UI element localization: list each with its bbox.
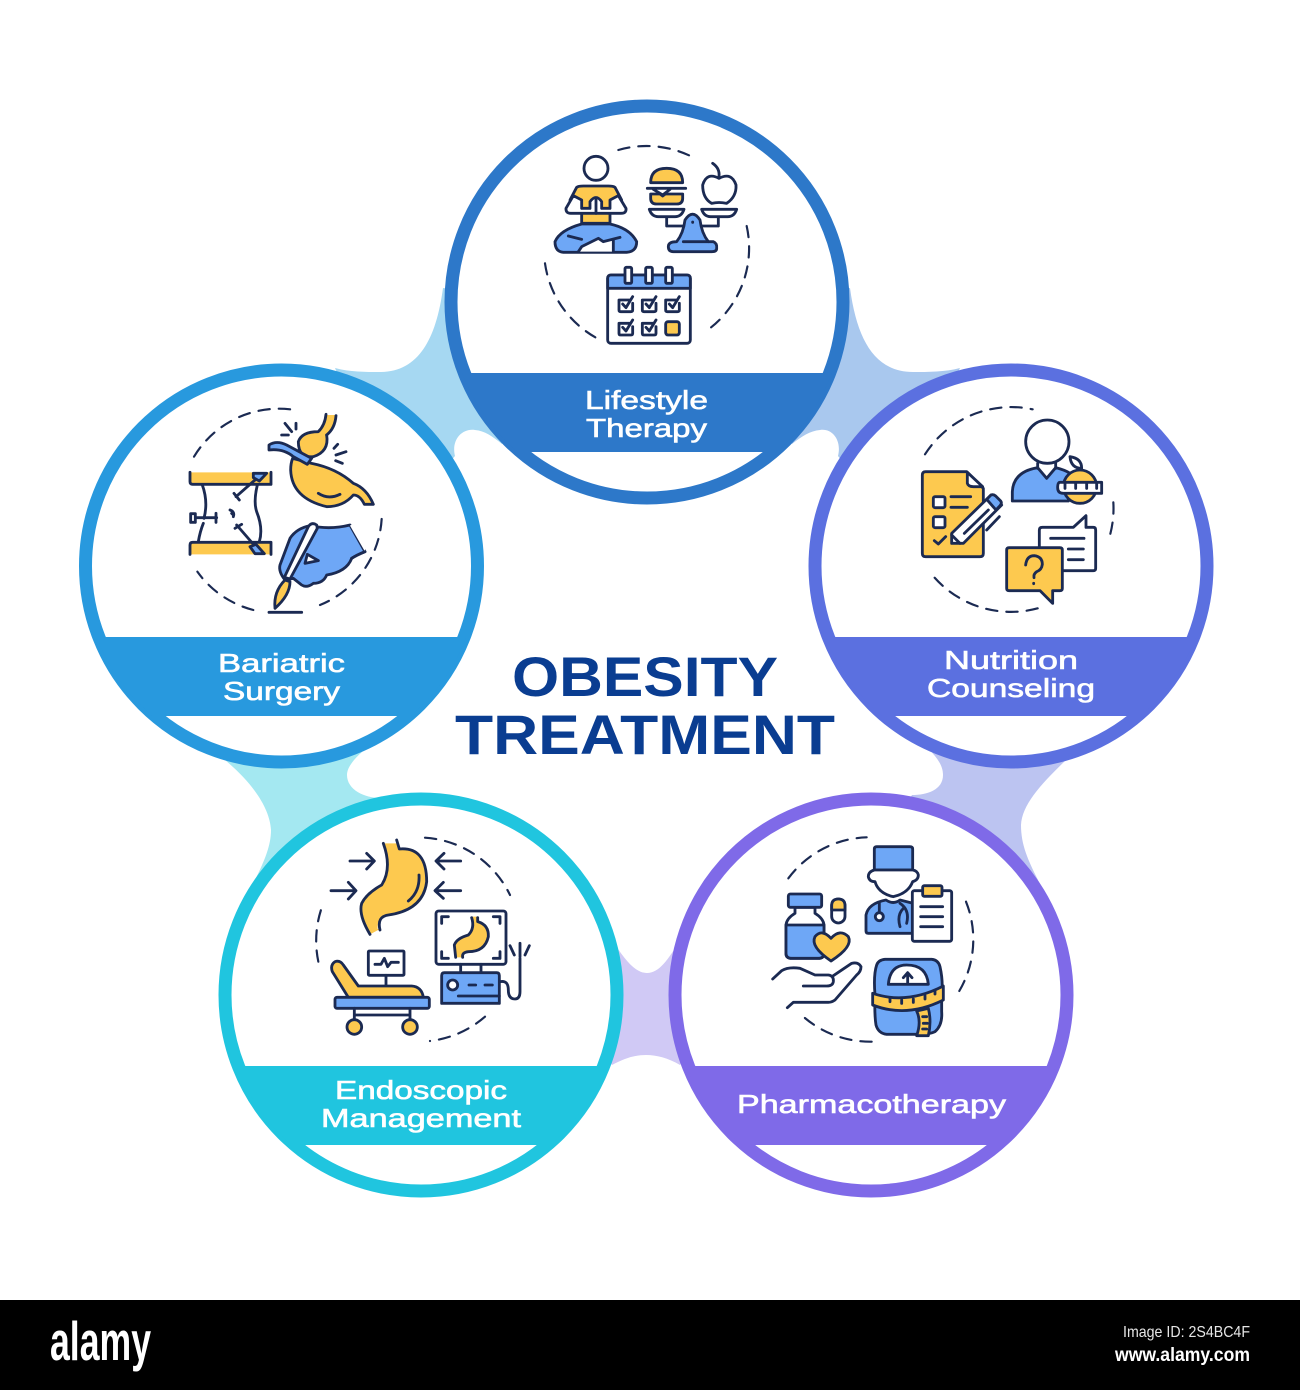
connector: bariatric to endoscopic [225,700,420,880]
panel: endoscopic management [214,799,628,1191]
label [585,385,708,443]
title: TREATMENT [455,703,835,766]
footer url: www.alamy.com [1114,1345,1250,1366]
label band [471,373,823,452]
connector: nutrition to pharmacotherapy [870,700,1066,880]
label band [695,1066,1047,1145]
ring [815,370,1207,762]
label [927,645,1095,703]
panel: lifestyle therapy [440,106,854,498]
label: Nutrition [944,645,1078,675]
label: Therapy [586,413,707,443]
label band [245,1066,597,1145]
icon: medicine, doctor and weight scale [773,837,973,1042]
connector: lifestyle to nutrition [735,288,960,520]
ring [675,799,1067,1191]
icon: stomach band, tissue and scalpel [190,409,382,612]
icon: checklist, nutritionist and chat [922,407,1114,612]
label [321,1075,522,1133]
icon: stomach, stretcher and endoscope [316,838,529,1041]
connector: endoscopic to pharmacotherapy [570,940,720,1065]
label: Bariatric [218,648,345,678]
title [455,645,835,766]
label band [835,637,1187,716]
label: Endoscopic [335,1075,507,1105]
footer logo: alamy [50,1310,151,1372]
connector: bariatric to lifestyle [335,288,560,520]
panel: nutrition counseling [804,370,1218,762]
label: Surgery [223,676,340,706]
icon: meditation, scale and calendar [545,146,749,343]
ring [86,370,478,762]
footer bar [0,1300,1300,1390]
label: Lifestyle [585,385,708,415]
title: OBESITY [512,645,778,708]
ring [451,106,843,498]
label: Counseling [927,673,1095,703]
ring [225,799,617,1191]
panel: bariatric surgery [75,370,489,762]
panel: pharmacotherapy [664,799,1078,1191]
label: Pharmacotherapy [737,1089,1006,1119]
label: Management [321,1103,522,1133]
label band [106,637,458,716]
footer image id: Image ID: 2S4BC4F [1123,1324,1250,1341]
label [218,648,345,706]
